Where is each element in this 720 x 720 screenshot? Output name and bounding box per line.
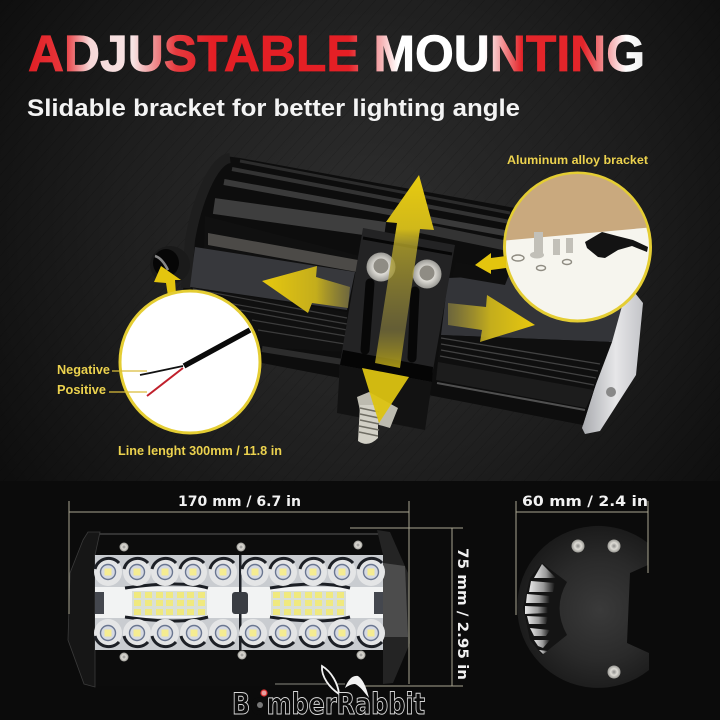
rabbit ears [322, 666, 369, 698]
side view end cap [517, 526, 649, 688]
dimension: depth 60 mm [516, 494, 648, 615]
slots [365, 283, 370, 350]
dimension: height 75 mm [350, 528, 470, 686]
concave recess [523, 563, 567, 655]
arrow: to bracket detail [475, 253, 506, 274]
left SMD bank [132, 591, 207, 616]
bottom LED row [94, 619, 385, 647]
rear knob [150, 246, 190, 284]
label: negative [57, 363, 147, 377]
housing [95, 532, 385, 686]
cylinder channel [204, 216, 360, 275]
right channel [452, 262, 510, 285]
left and right side clusters [95, 592, 104, 614]
top LED row [94, 558, 385, 586]
callout: bracket detail circle [500, 170, 655, 321]
top ridges [214, 161, 510, 246]
bolt and nut [357, 392, 398, 444]
logo: BomberRabbit [232, 666, 425, 720]
mounting bracket with bolts [150, 228, 455, 444]
bracket plate [337, 228, 455, 430]
label: negative: Negative [57, 363, 110, 377]
disc screws [572, 540, 620, 678]
flat plane left [190, 247, 355, 310]
dimension: width 170 mm: 170 mm / 6.7 in [178, 494, 301, 510]
arrow: to connector [154, 266, 181, 296]
background: upper dark panel [0, 0, 720, 481]
front view light bar [68, 530, 410, 687]
dimension: height 75 mm: 75 mm / 2.95 in [454, 548, 470, 680]
right end bracket [377, 530, 410, 684]
lower grooves right [436, 335, 612, 410]
right SMD bank [271, 591, 346, 616]
main housing silhouette [183, 156, 632, 425]
dimension: depth 60 mm: 60 mm / 2.4 in [522, 494, 648, 510]
label: positive: Positive [57, 383, 106, 397]
hardware: screws [530, 232, 573, 258]
background: lower dimensions panel [0, 481, 720, 720]
left end bracket [68, 532, 100, 687]
cable [184, 330, 250, 366]
arrow: right [448, 295, 535, 342]
dimension: width 170 mm [69, 494, 409, 684]
light bar perspective view [183, 156, 643, 434]
arrow: up with shaft [375, 175, 434, 368]
callout: aluminum bracket label: Aluminum alloy bracket [507, 155, 648, 167]
heat-sink fins [525, 564, 556, 654]
clamp band [340, 350, 433, 382]
arrow: down [362, 368, 409, 423]
silver end plate [582, 288, 643, 434]
callout: cable detail circle [120, 291, 260, 433]
LED panel [95, 555, 383, 650]
label: positive [57, 383, 147, 397]
lower block [337, 365, 432, 430]
title: ADJUSTABLE MOUNTING [28, 25, 645, 82]
center connector [232, 592, 248, 614]
flat plane right [441, 270, 632, 342]
panel screws [120, 540, 366, 662]
screw left [366, 252, 396, 282]
hardware: black bracket [585, 232, 648, 258]
screw right [412, 260, 442, 288]
lower grooves left [190, 287, 347, 362]
logo: BomberRabbit: BomberRabbit [232, 687, 425, 720]
arrow: left [262, 266, 350, 313]
subtitle: Slidable bracket for better lighting angle [27, 95, 520, 122]
end rim [186, 158, 230, 288]
label: line length: Line lenght 300mm / 11.8 in [118, 444, 282, 458]
